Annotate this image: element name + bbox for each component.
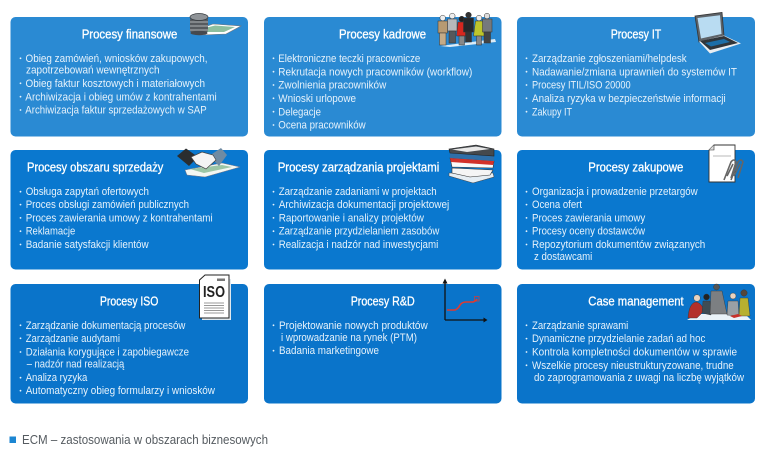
list: purchasing processes: z dostawcami [534,251,592,263]
list: R&D processes: Badania marketingowe [279,345,379,357]
list: finance processes: Obieg faktur kosztowych i materiałowych [26,78,205,90]
icon: stack of books [449,145,494,183]
list: case management processes: Wszelkie procesy nieustrukturyzowane, trudne [532,360,734,372]
list: sales processes [20,186,213,251]
list: sales processes: Badanie satysfakcji klientów [26,239,149,251]
list: purchasing processes: Repozytorium dokumentów związanych [532,239,705,251]
list: finance processes: Archiwizacja i obieg umów z kontrahentami [25,91,217,103]
list: purchasing processes: Proces zawierania umowy [532,212,646,224]
heading: Procesy finansowe: Procesy finansowe [82,28,177,42]
heading: Procesy kadrowe: Procesy kadrowe [339,28,426,42]
list: HR processes: Zwolnienia pracowników [278,80,386,92]
icon: document with paperclips [709,145,743,182]
list: purchasing processes: Procesy oceny dostawców [532,226,645,238]
panel: Procesy zarządzania projektami [264,145,502,270]
list: case management processes: do zaprogramowania z uwagi na liczbę wyjątków [534,372,744,384]
list: case management processes: Zarządzanie sprawami [532,320,628,332]
list: HR processes: Delegacje [278,106,321,118]
list: sales processes: Obsługa zapytań ofertowych [26,186,149,198]
panel: Procesy kadrowe [264,12,502,137]
list: IT processes: Nadawanie/zmiana uprawnień do systemów IT [532,66,737,78]
panel: Procesy zakupowe [517,145,755,270]
list: HR processes: Wnioski urlopowe [278,93,356,105]
list: IT processes: Procesy ITIL/ISO 20000 [532,80,631,92]
list: finance processes: Obieg zamówień, wniosków zakupowych, [26,53,208,65]
list: finance processes [20,53,217,117]
list: purchasing processes: Organizacja i prowadzenie przetargów [532,186,698,198]
heading: Case management: Case management [588,294,684,308]
list: case management processes: Kontrola kompletności dokumentów w sprawie [532,346,737,358]
list: ISO processes [20,320,215,397]
icon: business meeting [687,284,751,320]
list: project processes: Raportowanie i analizy projektów [279,212,424,224]
list: R&D processes: Projektowanie nowych produktów [279,320,428,332]
list: project processes [273,186,449,251]
panel: Procesy R&D [264,278,502,404]
list: project processes: Zarządzanie zadaniami w projektach [279,186,437,198]
list: project processes: Realizacja i nadzór nad inwestycjami [279,239,438,251]
list: ISO processes: – nadzór nad realizacją [27,358,125,370]
panel: Procesy finansowe [10,14,248,136]
list: sales processes: Reklamacje [26,226,75,238]
caption text: ECM – zastosowania w obszarach biznesowych [22,432,268,447]
list: R&D processes [273,320,428,357]
panel: Procesy ISO [10,275,248,404]
icon: caption square [10,436,16,443]
list: ISO processes: Zarządzanie audytami [26,333,120,345]
icon: group of employees [438,12,496,47]
list: IT processes: Zakupy IT [532,106,572,118]
list: HR processes: Rekrutacja nowych pracowników (workflow) [278,66,472,78]
list: sales processes: Proces zawierania umowy z kontrahentami [26,212,213,224]
list: ISO processes: Zarządzanie dokumentacją procesów [26,320,185,332]
list: finance processes: Archiwizacja faktur sprzedażowych w SAP [25,105,207,117]
list: purchasing processes: Ocena ofert [532,199,582,211]
list: ISO processes: Działania korygujące i zapobiegawcze [26,346,189,358]
list: HR processes: Elektroniczne teczki pracownicze [278,53,420,65]
list: case management processes: Dynamiczne przydzielanie zadań ad hoc [532,333,706,345]
heading: Procesy IT: Procesy IT [611,28,662,42]
list: HR processes: Ocena pracowników [278,120,366,132]
panel: Case management [517,284,755,404]
list: purchasing processes [526,186,705,263]
list: project processes: Zarządzanie przydzielaniem zasobów [279,226,439,238]
list: sales processes: Proces obsługi zamówień publicznych [26,199,189,211]
list: IT processes: Zarządzanie zgłoszeniami/helpdesk [532,53,687,65]
heading: Procesy zarządzania projektami: Procesy zarządzania projektami [278,160,439,174]
icon: ISO document [200,275,231,320]
list: IT processes [526,53,737,118]
icon: coins and banknotes [190,14,241,35]
panel: Procesy obszaru sprzedaży [10,148,248,270]
caption [10,432,268,447]
icon: ISO document: ISO [203,284,225,301]
list: case management processes [526,320,744,384]
heading: Procesy zakupowe: Procesy zakupowe [588,160,683,174]
list: project processes: Archiwizacja dokumentacji projektowej [279,199,449,211]
icon: rising line chart [442,278,488,322]
heading: Procesy obszaru sprzedaży: Procesy obszaru sprzedaży [27,160,164,174]
panel: Procesy IT [517,12,755,136]
heading: Procesy R&D: Procesy R&D [351,294,415,308]
icon: laptop [695,12,741,54]
list: HR processes [273,53,472,132]
list: ISO processes: Automatyczny obieg formularzy i wniosków [26,385,215,397]
list: ISO processes: Analiza ryzyka [26,372,88,384]
heading: Procesy ISO: Procesy ISO [100,294,159,308]
list: IT processes: Analiza ryzyka w bezpieczeństwie informacji [532,93,726,105]
list: finance processes: zapotrzebowań wewnętrznych [26,64,160,76]
list: R&D processes: i wprowadzanie na rynek (PTM) [281,332,417,344]
icon: handshake over documents [177,148,240,177]
